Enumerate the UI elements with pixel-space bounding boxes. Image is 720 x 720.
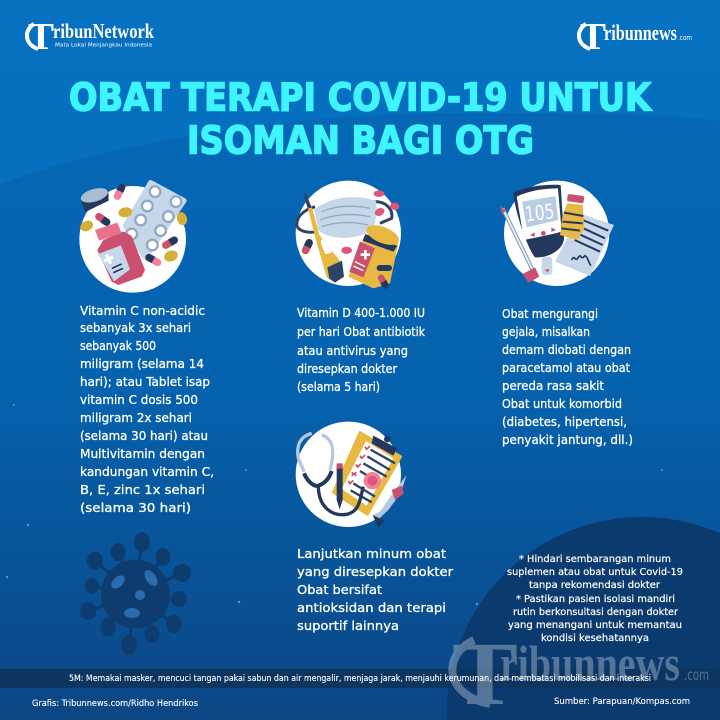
text: vitamin C: B, E, zinc 1x sehari [80, 482, 205, 497]
text: vitamin C: (selama 30 hari) [80, 500, 191, 515]
text: symptom relief: penyakit jantung, dll.) [502, 432, 633, 447]
text: vitamin C: (selama 30 hari) atau [80, 428, 208, 443]
text: vitamin C: kandungan vitamin C, [80, 464, 214, 479]
text: vitamin C: sebanyak 3x sehari [80, 320, 191, 335]
title: OBAT TERAPI COVID-19 UNTUK [69, 76, 652, 120]
text: vitamin C: sebanyak 500 [80, 338, 156, 353]
text: vitamin C [80, 303, 214, 515]
text: symptom relief: Obat mengurangi [502, 306, 598, 321]
icon: glucose meter, syringe and prescription [500, 181, 614, 286]
text: symptom relief: gejala, misalkan [502, 324, 590, 339]
note text: kondisi kesehatannya [541, 633, 649, 644]
watermark: Tribunnews.com: ribunnews [500, 635, 680, 691]
icon: medicine bottle and blister pack [79, 182, 189, 293]
footer note: 5M: Memakai masker, mencuci tangan pakai sabun dan air mengalir, menjaga jarak, menjauhi kerumunan, dan membatasi mobilisasi dan interaksi [69, 673, 651, 683]
note text: rutin berkonsultasi dengan dokter [513, 607, 679, 618]
text: vitamin C: hari); atau Tablet isap [80, 374, 210, 389]
footer bar [0, 669, 720, 688]
logo: Tribunnews.com: .com [678, 34, 692, 42]
logo: Tribunnews.com: ribunnews [604, 20, 677, 45]
decorative dots [6, 404, 702, 628]
text: vitamin C: Vitamin C non-acidic [80, 303, 205, 318]
logo: TribunNetwork [27, 16, 154, 58]
text: continue medication: yang diresepkan dokter [297, 564, 454, 579]
text: continue medication [297, 546, 454, 633]
icon: virus [80, 532, 191, 655]
logo: TribunNetwork: T [28, 16, 54, 58]
watermark: Tribunnews.com [452, 625, 709, 720]
note text: yang menangani untuk memantau [508, 620, 682, 631]
text: continue medication: Obat bersifat [297, 582, 382, 597]
text: vitamin D: (selama 5 hari) [297, 379, 380, 394]
text: vitamin C: miligram (selama 14 [80, 356, 204, 371]
text: vitamin D: per hari Obat antibiotik [297, 324, 426, 339]
logo: TribunNetwork: ribunNetwork [53, 19, 154, 43]
text: vitamin C: vitamin C dosis 500 [80, 392, 198, 407]
credit: sumber: Sumber: Parapuan/Kompas.com [554, 696, 690, 706]
note text: * Pastikan pasien isolasi mandiri [516, 594, 675, 605]
text: vitamin C: miligram 2x sehari [80, 410, 192, 425]
text: symptom relief [502, 306, 633, 447]
text: symptom relief: demam diobati dengan [502, 342, 631, 357]
note text: * Hindari sembarangan minum [519, 554, 671, 565]
logo: Tribunnews.com [579, 16, 692, 58]
text: symptom relief: (diabetes, hipertensi, [502, 414, 627, 429]
title: ISOMAN BAGI OTG [187, 118, 534, 162]
text: continue medication: suportif lainnya [297, 618, 399, 633]
text: symptom relief: pereda rasa sakit [502, 378, 604, 393]
credit: grafis: Grafis: Tribunnews.com/Ridho Hendrikos [32, 698, 198, 708]
panel: dark circle [447, 517, 720, 720]
text: continue medication: antioksidan dan terapi [297, 600, 446, 615]
title [69, 76, 652, 162]
note text: tanpa rekomendasi dokter [529, 580, 661, 591]
text: vitamin D: Vitamin D 400-1.000 IU [297, 305, 425, 320]
icon: glucose meter, syringe and prescription: 105 [524, 199, 556, 227]
text: vitamin C: Multivitamin dengan [80, 446, 205, 461]
text: symptom relief: Obat untuk komorbid [502, 396, 622, 411]
text: symptom relief: paracetamol atau obat [502, 360, 630, 375]
text: continue medication: Lanjutkan minum obat [297, 546, 446, 561]
note text: suplemen atau obat untuk Covid-19 [507, 567, 683, 578]
text: vitamin D: atau antivirus yang [297, 343, 408, 358]
text: vitamin D: diresepkan dokter [297, 361, 398, 376]
logo: TribunNetwork: Mata Lokal Menjangkau Indonesia [55, 42, 152, 48]
note text [507, 554, 683, 644]
logo: Tribunnews.com: T [580, 16, 606, 58]
icon: stethoscope and clipboard [296, 422, 407, 528]
text: vitamin D [297, 305, 426, 394]
icon: mask, thermometer and bottle [296, 181, 402, 290]
watermark: Tribunnews.com: .com [684, 666, 709, 684]
